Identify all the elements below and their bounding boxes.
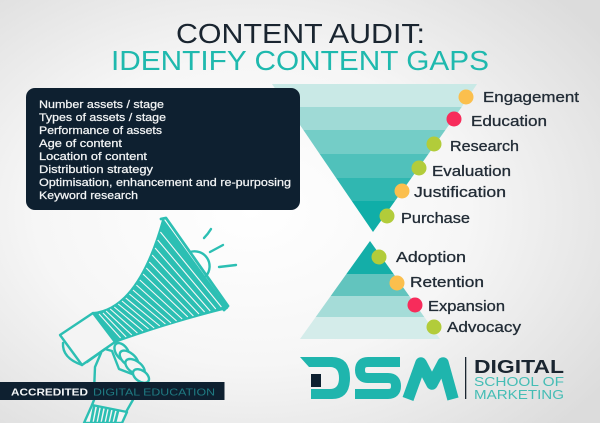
logo: DSM Digital School of Marketing: MARKETING <box>474 387 564 402</box>
panel: content audit checklist: Optimisation, enhancement and re-purposing <box>39 177 291 189</box>
logo: DSM Digital School of Marketing: DIGITAL <box>474 357 564 377</box>
funnel stage labels with dots: Justification <box>414 184 506 201</box>
panel: content audit checklist: Types of assets / stage <box>39 112 166 124</box>
pyramid stage labels with dots: Expansion <box>428 298 505 315</box>
title: IDENTIFY CONTENT GAPS <box>111 45 489 76</box>
funnel stage labels with dots <box>380 89 580 227</box>
banner: accredited digital education: ACCREDITED <box>11 386 88 398</box>
funnel stage labels with dots: Evaluation <box>432 163 511 180</box>
pyramid stage labels with dots: Retention <box>410 274 484 291</box>
pyramid stage labels with dots: Advocacy <box>447 319 522 336</box>
title: CONTENT AUDIT: <box>176 18 425 49</box>
panel: content audit checklist: Location of content <box>39 151 147 163</box>
panel: content audit checklist <box>26 88 300 210</box>
funnel: pre-purchase stages <box>272 84 477 232</box>
pyramid stage labels with dots: Adoption <box>396 249 466 266</box>
banner: accredited digital education <box>0 382 224 400</box>
pyramid: post-purchase stages <box>300 241 440 339</box>
funnel stage labels with dots: Engagement <box>483 89 580 106</box>
logo: DSM Digital School of Marketing: SCHOOL OF <box>474 374 564 389</box>
panel: content audit checklist: Age of content <box>39 138 122 150</box>
icon: megaphone held in hand <box>60 218 236 423</box>
panel: content audit checklist: Number assets / stage <box>39 99 164 111</box>
panel: content audit checklist: Distribution strategy <box>39 164 154 176</box>
logo: DSM Digital School of Marketing <box>300 357 564 402</box>
title <box>111 18 489 76</box>
funnel stage labels with dots: Research <box>450 138 519 155</box>
funnel stage labels with dots: Purchase <box>401 210 470 227</box>
panel: content audit checklist: Performance of assets <box>39 125 163 137</box>
funnel stage labels with dots: Education <box>471 113 547 130</box>
banner: accredited digital education: DIGITAL EDUCATION <box>93 386 215 398</box>
panel: content audit checklist: Keyword research <box>39 190 138 202</box>
pyramid stage labels with dots <box>372 249 522 336</box>
